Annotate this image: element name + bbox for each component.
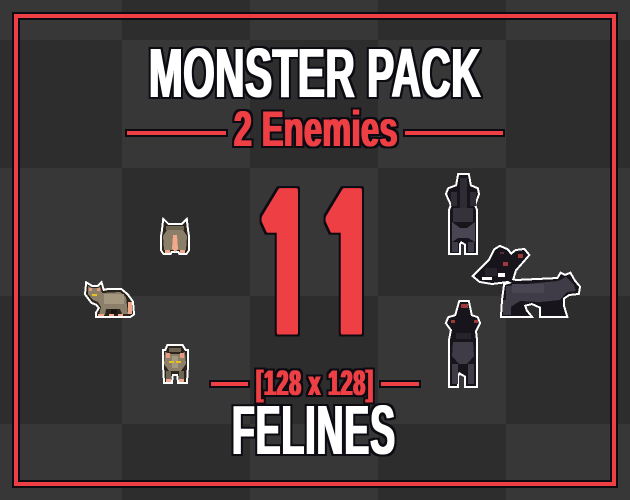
subtitle with rules: 2 Enemies — [234, 101, 398, 157]
size label with rules — [209, 364, 421, 403]
size label with rules: [128 x 128] — [256, 364, 374, 403]
sprite: dark panther side view — [474, 247, 579, 316]
big number 11: 11 — [253, 174, 381, 362]
sprite: tan cat front view — [164, 346, 187, 382]
subtitle with rules — [125, 101, 505, 157]
sprite: tan cat side view — [86, 284, 133, 316]
sprite: dark panther back view — [447, 175, 478, 253]
category label: FELINES — [232, 391, 396, 469]
sprite: dark panther front view — [447, 302, 479, 386]
sprite: tan cat back view — [162, 221, 188, 253]
